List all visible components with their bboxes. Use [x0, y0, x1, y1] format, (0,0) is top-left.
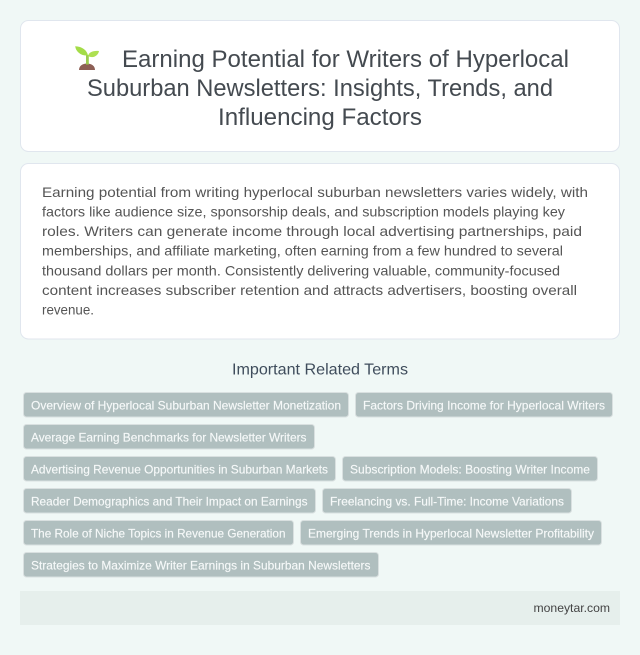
tag: Reader Demographics and Their Impact on Earnings — [31, 494, 308, 508]
tag: The Role of Niche Topics in Revenue Generation — [31, 526, 286, 540]
footer — [20, 591, 620, 625]
panel: summary — [20, 164, 620, 339]
tag: Factors Driving Income for Hyperlocal Writers — [363, 398, 605, 412]
tag — [356, 392, 612, 417]
tag — [24, 456, 336, 481]
tag — [24, 424, 314, 449]
tag: Strategies to Maximize Writer Earnings in Suburban Newsletters — [31, 558, 370, 572]
text block: summary paragraph: memberships, and affiliate marketing, often earning from a few hundred to several — [42, 242, 563, 258]
tag: Overview of Hyperlocal Suburban Newsletter Monetization — [31, 398, 341, 412]
heading: title — [87, 46, 569, 131]
text block: summary paragraph: content increases subscriber retention and attracts advertisers, boosting overall — [42, 282, 577, 298]
heading: title: Earning Potential for Writers of Hyperlocal — [122, 46, 569, 73]
tag — [322, 488, 572, 513]
heading: title: Suburban Newsletters: Insights, Trends, and — [87, 75, 553, 102]
text block: summary paragraph: revenue. — [42, 302, 94, 318]
tag — [24, 488, 316, 513]
text block: summary paragraph: thousand dollars per month. Consistently delivering valuable, community-focused — [42, 262, 560, 278]
tag list: related terms — [24, 392, 612, 577]
text block: summary paragraph — [42, 184, 588, 318]
tag: Subscription Models: Boosting Writer Income — [350, 462, 590, 476]
tag — [24, 552, 378, 577]
text block: summary paragraph: factors like audience size, sponsorship deals, and subscription models playing key — [42, 204, 565, 220]
footer: source: moneytar.com — [534, 601, 610, 615]
heading: related terms: Important Related Terms — [232, 362, 408, 378]
text block: summary paragraph: roles. Writers can generate income through local advertising partnerships, paid — [42, 223, 582, 239]
tag — [342, 456, 598, 481]
tag — [24, 392, 348, 417]
tag — [300, 520, 602, 545]
panel: title card — [20, 20, 620, 152]
heading: title: Influencing Factors — [218, 104, 422, 131]
tag: Freelancing vs. Full-Time: Income Variations — [330, 494, 564, 508]
text block: summary paragraph: Earning potential from writing hyperlocal suburban newsletters varies widely, with — [42, 184, 588, 200]
icon: sprout — [75, 46, 99, 70]
tag: Emerging Trends in Hyperlocal Newsletter Profitability — [308, 526, 594, 540]
tag: Advertising Revenue Opportunities in Suburban Markets — [31, 462, 328, 476]
tag — [24, 520, 294, 545]
tag: Average Earning Benchmarks for Newsletter Writers — [31, 430, 306, 444]
